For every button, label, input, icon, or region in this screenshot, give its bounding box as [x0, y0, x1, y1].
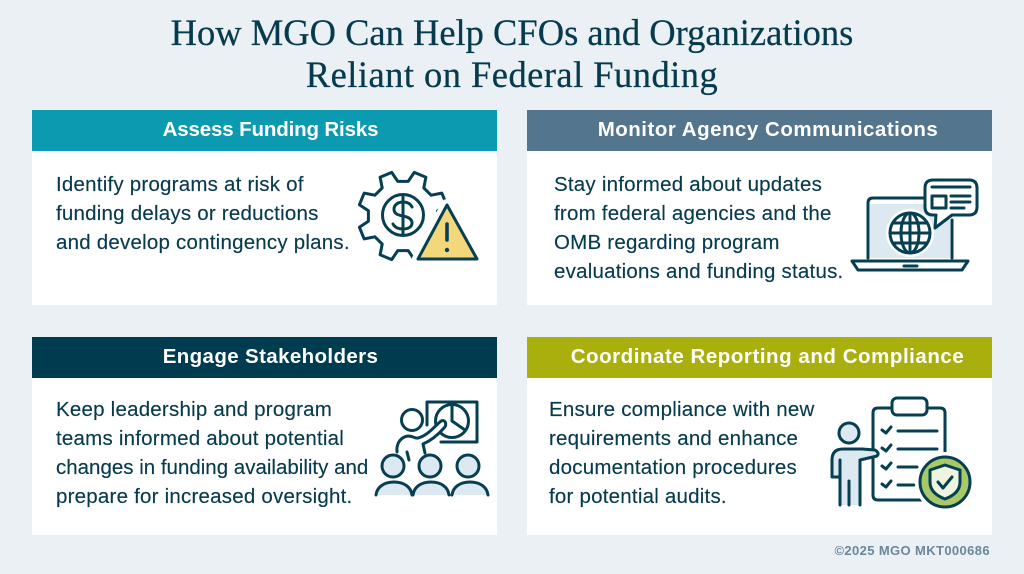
title: Reliant on Federal Funding: [306, 54, 718, 94]
panel: monitor agency communications: [527, 110, 992, 305]
heading: monitor agency communications: [527, 110, 992, 151]
text: coordinate reporting and compliance: [549, 398, 815, 508]
heading: engage stakeholders: [32, 337, 497, 378]
text: assess funding risks: and develop contingency plans.: [56, 231, 350, 254]
text: monitor agency communications: OMB regarding program: [554, 231, 780, 254]
text: coordinate reporting and compliance: documentation procedures: [549, 456, 797, 479]
heading: assess funding risks: [32, 110, 497, 151]
text: monitor agency communications: Stay informed about updates: [554, 173, 822, 196]
panel: coordinate reporting and compliance: [527, 337, 992, 535]
title: How MGO Can Help CFOs and Organizations: [171, 12, 853, 53]
heading: engage stakeholders: Engage Stakeholders: [163, 345, 378, 368]
copyright footer: ©2025 MGO MKT000686: [834, 543, 990, 558]
title: [171, 12, 853, 96]
text: monitor agency communications: [554, 173, 843, 283]
text: assess funding risks: [56, 173, 350, 254]
heading: coordinate reporting and compliance: Coordinate Reporting and Compliance: [571, 345, 964, 368]
icon: gear with dollar and warning triangle: [359, 172, 477, 260]
text: assess funding risks: funding delays or reductions: [56, 202, 319, 225]
heading: monitor agency communications: Monitor Agency Communications: [598, 118, 938, 141]
heading: coordinate reporting and compliance: [527, 337, 992, 378]
panel: engage stakeholders: [32, 337, 497, 535]
heading: assess funding risks: Assess Funding Risks: [163, 118, 378, 141]
text: monitor agency communications: evaluations and funding status.: [554, 260, 843, 283]
icon: laptop with globe and speech bubble: [852, 180, 977, 270]
icon: person with checklist and shield: [832, 398, 975, 512]
text: engage stakeholders: teams informed about potential: [56, 427, 344, 450]
text: assess funding risks: Identify programs at risk of: [56, 173, 304, 196]
text: monitor agency communications: from federal agencies and the: [554, 202, 832, 225]
icon: presenter with pie chart and audience: [376, 402, 488, 495]
text: coordinate reporting and compliance: requirements and enhance: [549, 427, 798, 450]
text: engage stakeholders: [56, 398, 368, 508]
text: engage stakeholders: Keep leadership and program: [56, 398, 332, 421]
text: coordinate reporting and compliance: for potential audits.: [549, 485, 727, 508]
text: engage stakeholders: prepare for increased oversight.: [56, 485, 352, 508]
panel: assess funding risks: [32, 110, 497, 305]
text: engage stakeholders: changes in funding availability and: [56, 456, 368, 479]
text: coordinate reporting and compliance: Ensure compliance with new: [549, 398, 815, 421]
